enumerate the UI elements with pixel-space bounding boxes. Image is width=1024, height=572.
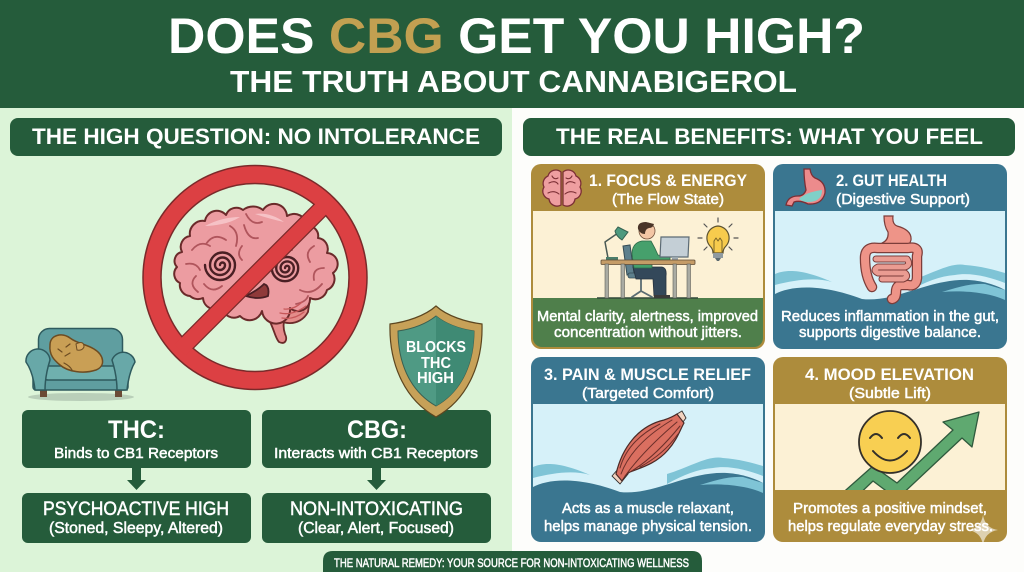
chair: [623, 245, 634, 275]
box: non-intoxicating: NON-INTOXICATING: [290, 499, 463, 520]
card 2: gut health: (Digestive Support): [836, 191, 970, 208]
panel: the real benefits: [523, 118, 1015, 545]
lamp: [605, 233, 618, 258]
icon: small brain: [543, 170, 581, 206]
box: psychoactive high: PSYCHOACTIVE HIGH: [43, 499, 229, 520]
card 2: gut health: supports digestive balance.: [799, 324, 981, 341]
illustration: person at desk: [597, 218, 738, 298]
subtitle: THE TRUTH ABOUT CANNABIGEROL: [230, 64, 797, 99]
monitor: [660, 237, 689, 257]
left panel heading: [10, 118, 502, 156]
right panel heading: [523, 118, 1015, 156]
box: CBG: Interacts with CB1 Receptors: [274, 445, 478, 462]
illustration: waves: [533, 458, 763, 503]
card 4: mood elevation: helps regulate everyday stress.: [788, 518, 993, 535]
box: non-intoxicating: [262, 493, 491, 543]
icon: dizzy brain crossed out: [152, 174, 358, 380]
title: DOES CBG GET YOU HIGH?: [168, 8, 865, 64]
box: THC: [22, 410, 251, 468]
icon: shield blocks THC high: HIGH: [417, 370, 454, 387]
prohibition sign: [152, 174, 358, 380]
icon: shield blocks THC high: [390, 306, 482, 417]
card 3: pain and muscle relief: Acts as a muscle relaxant,: [562, 500, 734, 517]
icon: stomach: [786, 169, 825, 206]
arrow: THC to psychoactive high: [127, 468, 146, 490]
card 1: focus and energy: (The Flow State): [612, 191, 724, 208]
brain: [174, 204, 338, 343]
illustration: muscle: [612, 411, 686, 484]
box: THC: THC:: [108, 416, 165, 444]
card 3: pain and muscle relief: (Targeted Comfort): [582, 385, 714, 402]
box: psychoactive high: [22, 493, 251, 543]
light bulb: [707, 226, 729, 253]
card 2: gut health: 2. GUT HEALTH: [836, 171, 947, 190]
footer bar: THE NATURAL REMEDY: YOUR SOURCE FOR NON-INTOXICATING WELLNESS: [334, 556, 689, 570]
box: CBG: [262, 410, 491, 468]
card 1: focus and energy: Mental clarity, alertness, improved: [537, 308, 758, 325]
right panel heading: THE REAL BENEFITS: WHAT YOU FEEL: [556, 124, 983, 149]
desk: [601, 260, 695, 264]
card 2: gut health: [773, 164, 1007, 349]
cerebellum: [280, 302, 306, 318]
box: non-intoxicating: (Clear, Alert, Focused): [298, 520, 454, 537]
card 4: mood elevation: (Subtle Lift): [849, 385, 931, 402]
spiral eye left: [205, 252, 235, 280]
card 3: pain and muscle relief: 3. PAIN & MUSCLE RELIEF: [544, 365, 751, 384]
potato: [50, 335, 103, 372]
card 4: mood elevation: Promotes a positive mindset,: [793, 500, 987, 517]
icon: shield blocks THC high: THC: [421, 355, 451, 372]
card 4: mood elevation: 4. MOOD ELEVATION: [805, 365, 974, 384]
icon: couch potato: [26, 328, 135, 401]
left panel heading: THE HIGH QUESTION: NO INTOLERANCE: [32, 124, 480, 149]
card 4: mood elevation: [773, 357, 1007, 545]
card 2: gut health: Reduces inflammation in the gut,: [781, 308, 999, 325]
box: psychoactive high: (Stoned, Sleepy, Altered): [49, 520, 223, 537]
box: CBG: CBG:: [347, 416, 407, 444]
icon: shield blocks THC high: BLOCKS: [406, 339, 466, 356]
arrow: CBG to non-intoxicating: [367, 468, 386, 490]
spiral eye right: [272, 257, 298, 281]
card 1: focus and energy: 1. FOCUS & ENERGY: [589, 171, 748, 190]
card 3: pain and muscle relief: [531, 357, 765, 542]
card 1: focus and energy: [531, 164, 765, 349]
card 1: focus and energy: concentration without jitters.: [554, 324, 742, 341]
illustration: waves: [775, 265, 1005, 310]
illustration: rising arrow: [845, 411, 980, 490]
panel: the high question: [0, 108, 512, 572]
person: [633, 267, 666, 296]
card 3: pain and muscle relief: helps manage physical tension.: [544, 518, 752, 535]
header banner: [0, 0, 1024, 108]
box: THC: Binds to CB1 Receptors: [54, 445, 218, 462]
footer bar: [323, 551, 702, 572]
mouth: [246, 284, 268, 298]
icon: sparkle watermark: [968, 515, 998, 545]
illustration: digestive system: [865, 216, 918, 299]
illustration: smiley face: [859, 411, 921, 473]
